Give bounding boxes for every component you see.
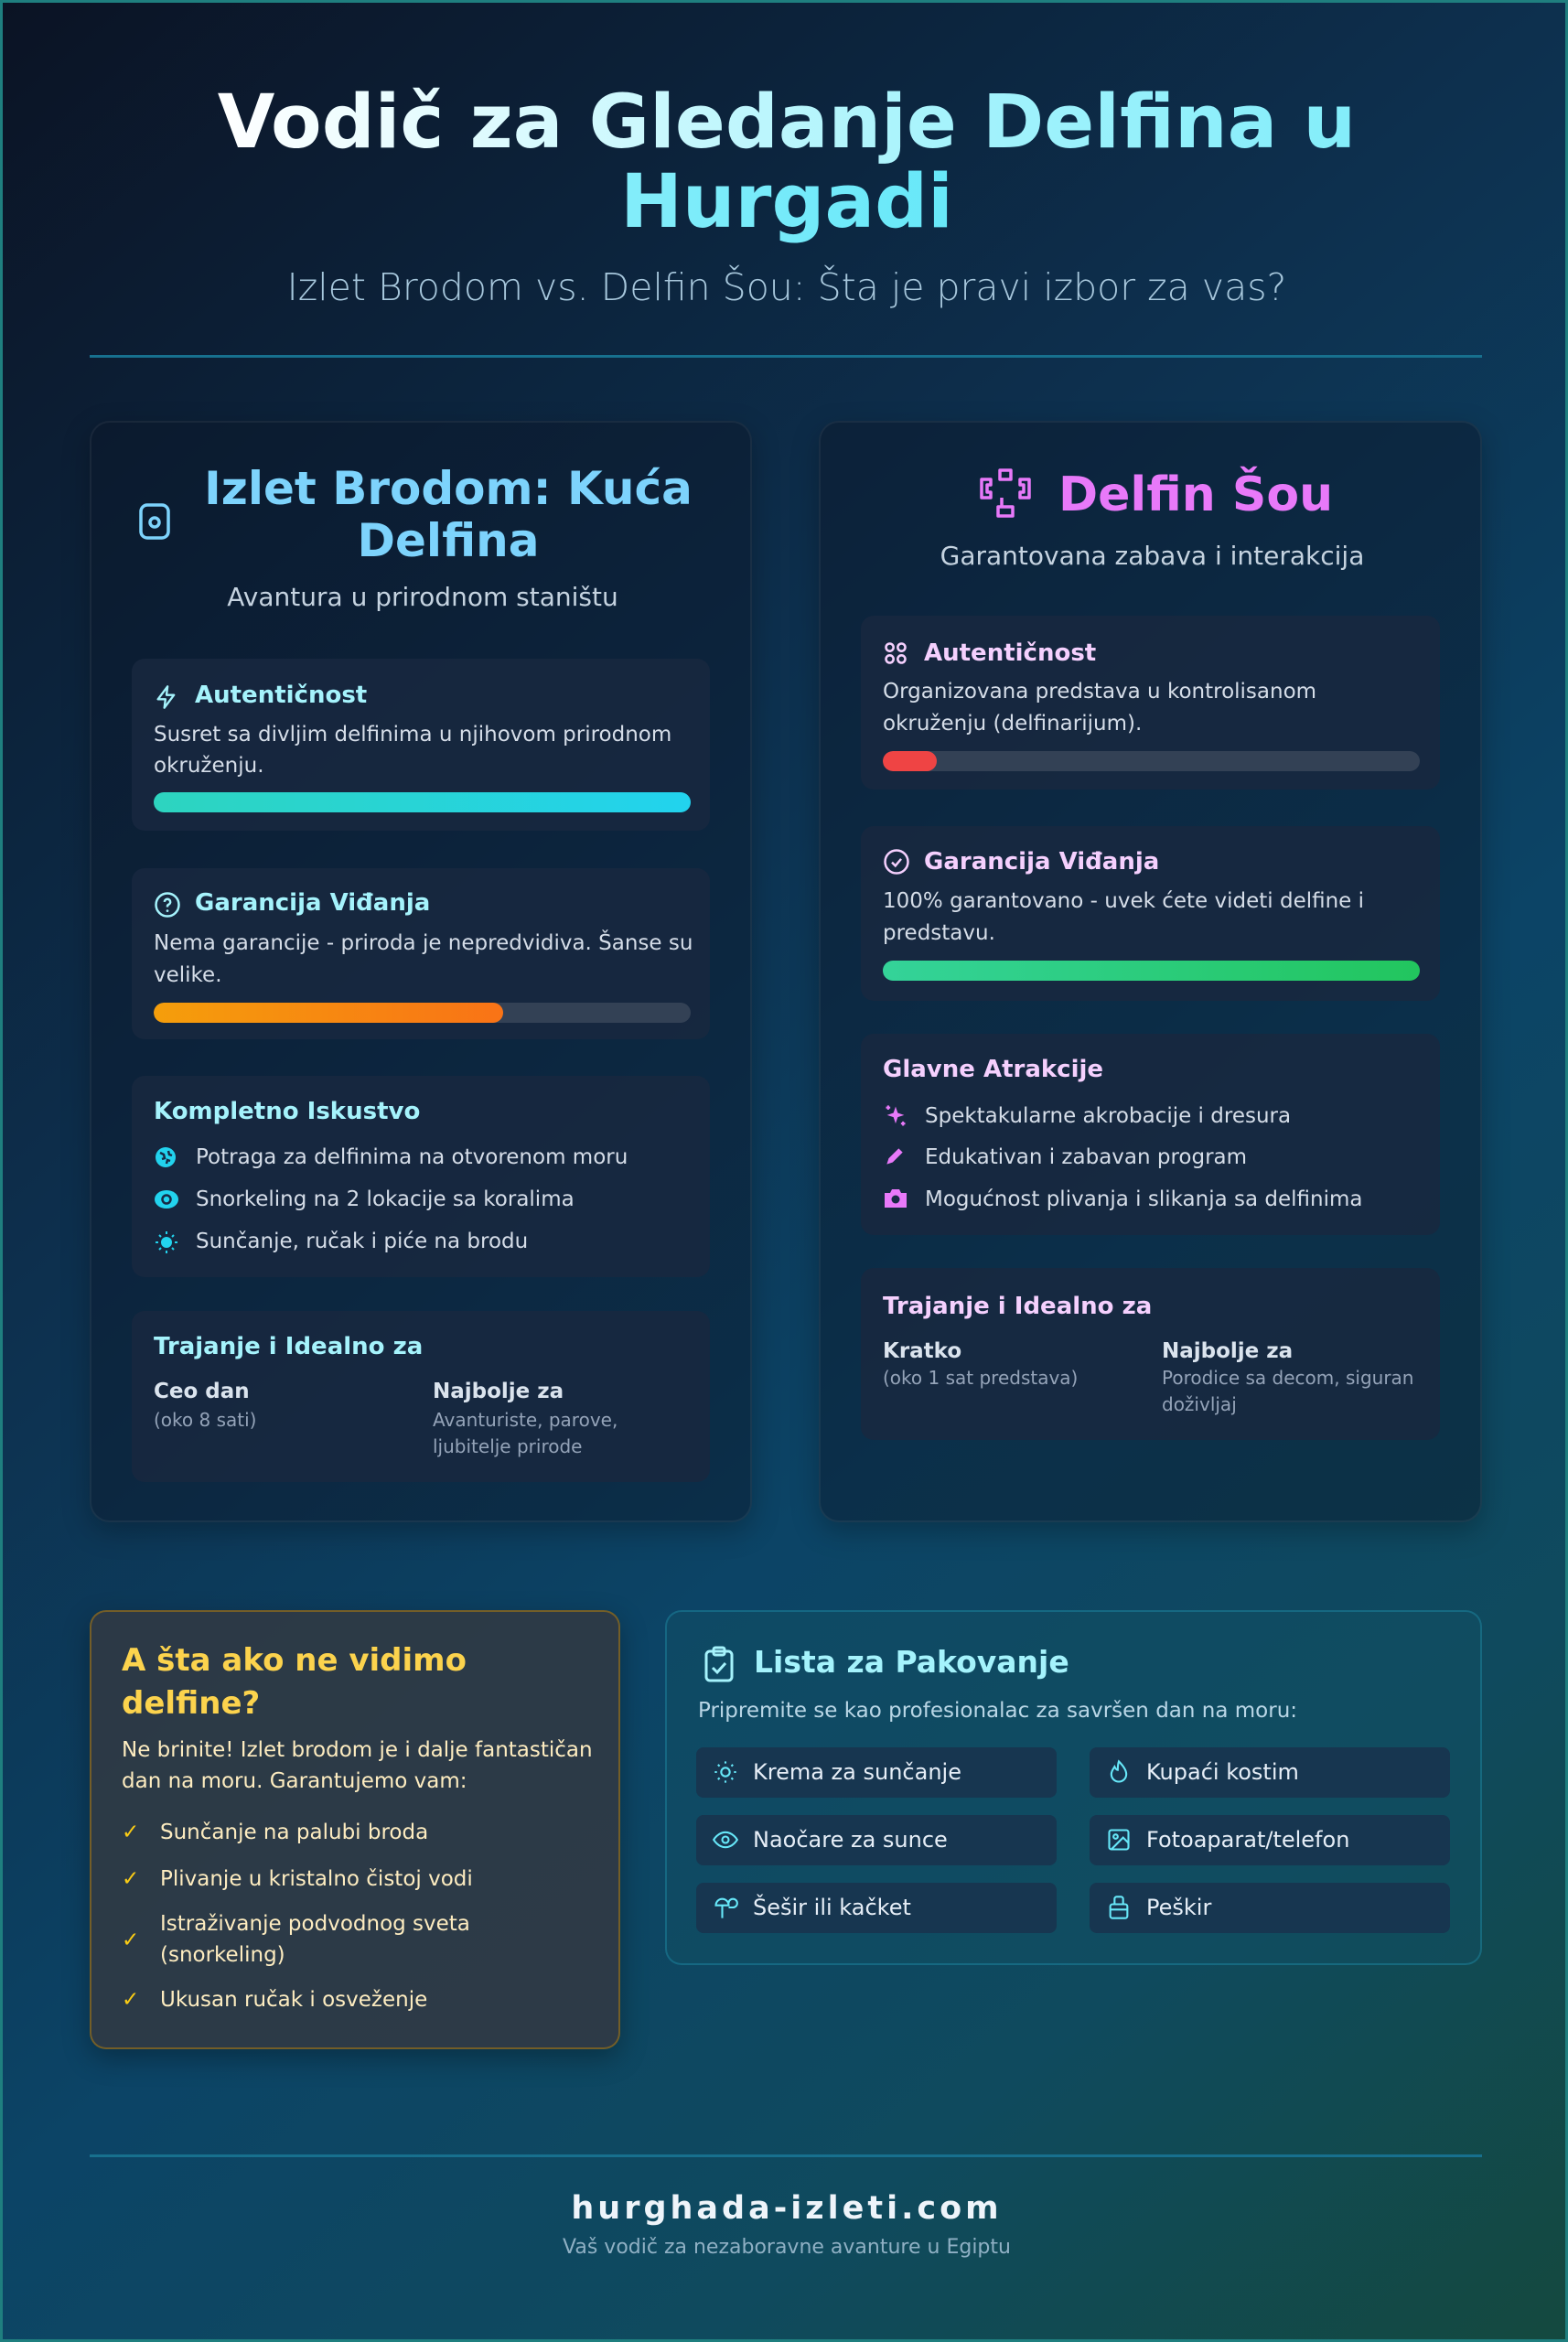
box: guarantee left [132,868,710,1039]
box: duration left: (oko 8 sati) [154,1409,256,1431]
box: duration left: Trajanje i Idealno za [154,1333,423,1360]
panel: dolphin show [819,421,1482,1522]
box: duration left: Avanturiste, parove, [433,1409,618,1431]
item: sunscreen [696,1747,1057,1798]
box: duration right: Kratko [883,1339,961,1363]
box: complete experience: Potraga za delfinima na otvorenom moru [196,1145,628,1169]
box: authenticity right [861,616,1440,790]
box: complete experience: Kompletno Iskustvo [154,1098,420,1125]
panel: what if no dolphins: dan na moru. Garantujemo vam: [122,1769,467,1793]
list: guarantees: Sunčanje na palubi broda [160,1821,428,1844]
panel: packing list: Pripremite se kao profesionalac za savršen dan na moru: [698,1699,1297,1723]
list: guarantees: Ukusan ručak i osveženje [160,1988,427,2012]
item: camera: Fotoaparat/telefon [1146,1827,1349,1853]
box: duration right: doživljaj [1162,1393,1237,1415]
panel: what if no dolphins: Ne brinite! Izlet brodom je i dalje fantastičan [122,1738,593,1762]
panel: what if no dolphins [90,1610,620,2049]
box: authenticity right: Autentičnost [924,639,1096,667]
box: authenticity left [132,659,710,831]
item: swimsuit: Kupaći kostim [1146,1759,1299,1785]
box: main attractions: Spektakularne akrobacije i dresura [925,1104,1291,1128]
panel: packing list: Lista za Pakovanje [754,1644,1069,1680]
icon: pencil [886,1148,903,1165]
heading: Delfin Šou [1058,467,1333,522]
icon: eye [155,1190,178,1209]
footer: Vaš vodič za nezaboravne avanture u Egiptu [563,2236,1011,2259]
box: duration left: Ceo dan [154,1380,250,1403]
title: Vodič za Gledanje Delfina u [218,80,1356,166]
item: swimsuit [1090,1747,1450,1798]
box: complete experience [132,1076,710,1277]
item: camera [1090,1815,1450,1865]
box: duration right [861,1268,1440,1440]
icon: clipboard [704,1647,734,1681]
list: guarantees: Plivanje u kristalno čistoj vodi [160,1867,473,1891]
box: guarantee left: velike. [154,963,222,987]
box: main attractions [861,1034,1440,1235]
box: duration right: (oko 1 sat predstava) [883,1367,1078,1389]
list: guarantees: ✓ [122,1821,139,1844]
box: guarantee left: Garancija Viđanja [195,889,430,917]
item: towel [1090,1883,1450,1933]
box: complete experience: Snorkeling na 2 lokacije sa koralima [196,1187,575,1211]
item: sunscreen: Krema za sunčanje [753,1759,961,1785]
item: sunglasses [696,1815,1057,1865]
icon: show [980,468,1031,518]
panel: what if no dolphins: delfine? [122,1685,260,1722]
item: towel: Peškir [1146,1895,1211,1920]
title [218,80,1356,245]
box: duration right: Najbolje za [1162,1339,1293,1363]
box: authenticity right: okruženju (delfinarijum). [883,712,1142,736]
icon: sun [156,1231,177,1253]
list: guarantees: ✓ [122,1867,139,1891]
title: Hurgadi [620,159,953,245]
icon: sparkles [886,1105,906,1125]
box: main attractions: Edukativan i zabavan program [925,1145,1247,1169]
box: duration left [132,1311,710,1482]
box: guarantee right: predstavu. [883,921,995,945]
icon: camera [885,1189,907,1208]
item: hat [696,1883,1057,1933]
box: duration left: ljubitelje prirode [433,1435,582,1457]
footer: hurghada-izleti.com [571,2190,1003,2227]
heading: Delfina [358,514,539,567]
item: sunglasses: Naočare za sunce [753,1827,948,1853]
list: guarantees: ✓ [122,1928,139,1952]
list: guarantees: (snorkeling) [160,1943,285,1967]
box: guarantee right [861,826,1440,1001]
box: guarantee left: Nema garancije - priroda je nepredvidiva. Šanse su [154,931,693,955]
box: main attractions: Glavne Atrakcije [883,1056,1103,1083]
icon: boat [139,503,170,540]
box: authenticity right: Organizovana predstava u kontrolisanom [883,680,1316,704]
subheading: Avantura u prirodnom staništu [227,582,618,612]
list: guarantees [122,1821,473,2012]
box: authenticity left: Susret sa divljim delfinima u njihovom prirodnom [154,723,671,747]
heading [204,462,693,567]
box: authenticity left: Autentičnost [195,682,367,709]
list: guarantees: ✓ [122,1988,139,2012]
item: hat: Šešir ili kačket [753,1895,911,1920]
box: complete experience: Sunčanje, ručak i piće na brodu [196,1230,528,1253]
box: guarantee right: Garancija Viđanja [924,848,1159,876]
box: guarantee right: 100% garantovano - uvek ćete videti delfine i [883,889,1364,913]
box: duration right: Trajanje i Idealno za [883,1293,1152,1320]
subheading: Garantovana zabava i interakcija [940,541,1364,571]
subtitle: Izlet Brodom vs. Delfin Šou: Šta je pravi izbor za vas? [287,265,1286,309]
box: main attractions: Mogućnost plivanja i slikanja sa delfinima [925,1187,1363,1211]
footer [563,2190,1011,2259]
panel: boat trip [90,421,752,1522]
icon: globe [156,1147,176,1167]
box: duration right: Porodice sa decom, siguran [1162,1367,1413,1389]
heading: Izlet Brodom: Kuća [204,462,693,515]
box: authenticity left: okruženju. [154,754,264,778]
panel: packing list [665,1610,1482,1965]
panel: what if no dolphins: A šta ako ne vidimo [122,1642,467,1679]
box: duration left: Najbolje za [433,1380,564,1403]
list: guarantees: Istraživanje podvodnog sveta [160,1912,470,1936]
